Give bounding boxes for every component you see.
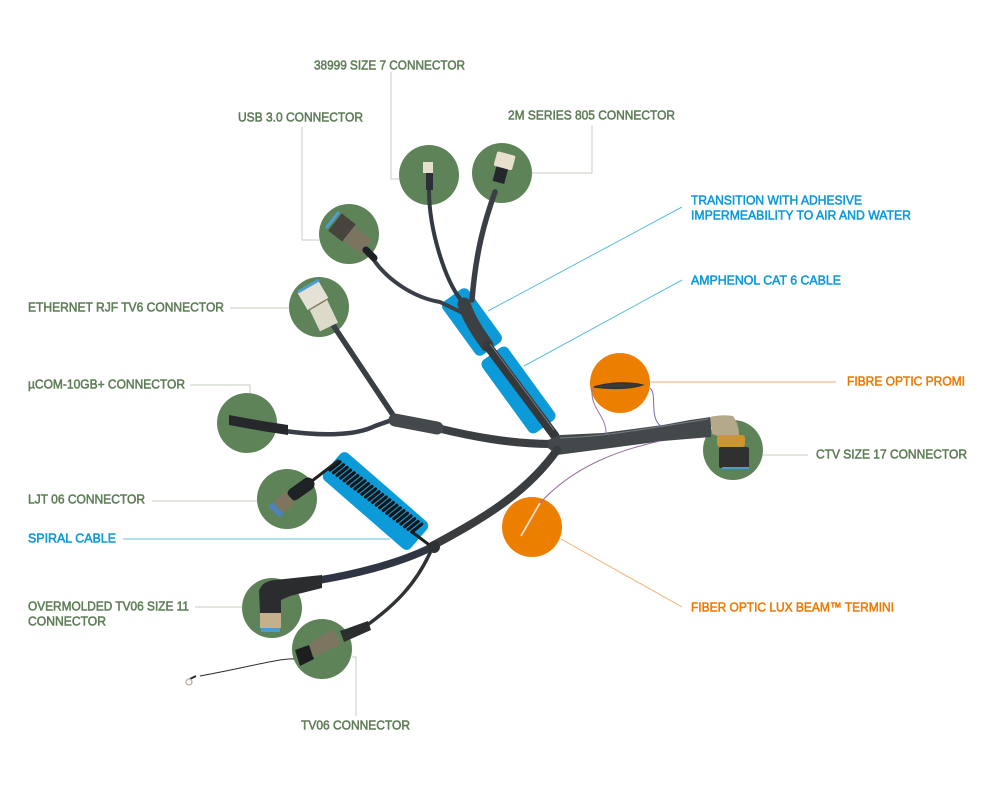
connector: CTV size 17 xyxy=(710,415,749,469)
connector: 2M xyxy=(490,151,516,185)
label: Ethernet: ETHERNET RJF TV6 CONNECTOR xyxy=(28,300,224,314)
label: overmolded: CONNECTOR xyxy=(28,614,106,628)
uCOM cable xyxy=(285,420,392,434)
label: fibre optic promi: FIBRE OPTIC PROMI xyxy=(847,374,965,388)
Amphenol cable xyxy=(487,345,555,436)
connector: 38999 xyxy=(423,162,433,190)
label: overmolded: OVERMOLDED TV06 SIZE 11 xyxy=(28,598,189,614)
connector: Ethernet xyxy=(298,280,329,327)
branch: 2M cable xyxy=(472,192,495,300)
label: LJT: LJT 06 CONNECTOR xyxy=(28,492,145,506)
label: 38999: 38999 SIZE 7 CONNECTOR xyxy=(314,58,465,72)
orange fibre circles xyxy=(502,353,650,557)
overmolded cable xyxy=(320,548,430,580)
green connector circles xyxy=(217,143,763,679)
lower junction xyxy=(428,541,440,553)
connector: uCOM xyxy=(229,415,288,435)
blue highlight: transition xyxy=(440,286,504,358)
branch: 38999 cable xyxy=(429,190,461,300)
ground wire with ring terminal xyxy=(186,659,294,685)
Ethernet cable xyxy=(333,325,393,415)
label: 2M series: 2M SERIES 805 CONNECTOR xyxy=(508,108,675,122)
blue highlight: Amphenol cable xyxy=(479,344,558,436)
lower branch xyxy=(432,450,557,546)
fibre optic promi splice xyxy=(594,383,642,388)
connector: LJT xyxy=(274,461,338,512)
label: overmolded xyxy=(28,598,189,628)
cable harness xyxy=(285,190,711,626)
label: transition: IMPERMEABILITY TO AIR AND WATER xyxy=(691,208,911,222)
label: fiber optic lux beam: FIBER OPTIC LUX BEAM™ TERMINI xyxy=(691,600,894,614)
left trunk xyxy=(437,428,552,444)
transition sleeve xyxy=(464,304,487,345)
label: USB 3.0: USB 3.0 CONNECTOR xyxy=(238,110,363,124)
branch: USB cable xyxy=(370,254,465,314)
right trunk xyxy=(548,417,711,455)
coil lead xyxy=(412,532,432,547)
label: uCOM: µCOM-10GB+ CONNECTOR xyxy=(28,376,185,392)
label: spiral cable: SPIRAL CABLE xyxy=(28,530,116,546)
label: CTV: CTV SIZE 17 CONNECTOR xyxy=(816,446,967,462)
label: Amphenol: AMPHENOL CAT 6 CABLE xyxy=(691,272,841,288)
leader lines xyxy=(123,72,836,716)
fibre optic strands xyxy=(521,388,662,536)
connector: TV06 xyxy=(295,621,371,666)
blue highlight: spiral cable xyxy=(320,450,431,552)
connector: overmolded TV06 xyxy=(259,575,322,632)
label: transition: TRANSITION WITH ADHESIVE xyxy=(691,192,862,208)
connector: USB xyxy=(327,213,374,258)
TV06 cable xyxy=(366,553,430,626)
label: TV06: TV06 CONNECTOR xyxy=(301,718,410,732)
spiral coil xyxy=(330,462,422,532)
label: transition xyxy=(691,192,911,222)
